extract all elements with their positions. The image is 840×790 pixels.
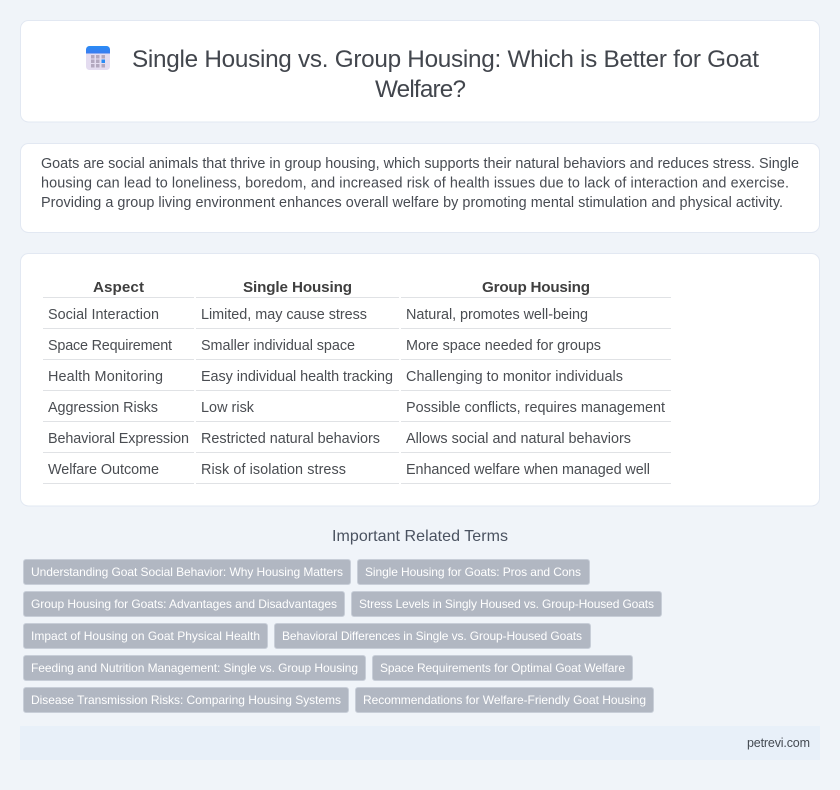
row: social interaction: Natural, promotes well-being [406,307,588,323]
row: health monitoring: Health Monitoring [48,369,163,385]
tag: Understanding Goat Social Behavior: Why Housing Matters [31,565,343,579]
intro text: Providing a group living environment enhances overall welfare by promoting mental stimulation and physical activity. [41,195,783,211]
row: aggression risks: Low risk [201,400,255,416]
row: behavioral expression: Behavioral Expression [48,431,189,447]
tag: Single Housing for Goats: Pros and Cons [365,565,581,579]
row: behavioral expression: Restricted natural behaviors [201,431,380,447]
title: Welfare? [375,76,466,103]
table header [43,279,671,298]
table header: Group Housing [482,279,590,296]
panel: header [20,20,820,122]
tag [24,624,268,648]
row: welfare outcome [43,462,671,484]
footer: petrevi.com [747,736,810,750]
row: behavioral expression: Allows social and natural behaviors [406,431,631,447]
row: welfare outcome: Enhanced welfare when managed well [406,462,650,478]
intro text: Goats are social animals that thrive in group housing, which supports their natural behaviors and reduces stress. Single [41,156,799,172]
icon: calendar [86,46,110,70]
tag [24,688,348,712]
title [132,46,759,103]
row: space requirement: Smaller individual space [201,338,355,354]
row: aggression risks [43,400,671,422]
row: social interaction [43,307,671,329]
tag: Behavioral Differences in Single vs. Group-Housed Goats [282,629,582,643]
row: welfare outcome: Risk of isolation stress [201,462,346,478]
row: social interaction: Social Interaction [48,307,159,323]
row: space requirement [43,338,671,360]
tag [358,560,590,584]
tag [24,656,366,680]
tag [24,592,344,616]
row: aggression risks: Aggression Risks [48,400,158,416]
row: social interaction: Limited, may cause stress [201,307,367,323]
table header: Aspect [93,279,144,296]
title: Single Housing vs. Group Housing: Which is Better for Goat [132,46,759,73]
tag: Recommendations for Welfare-Friendly Goat Housing [363,693,646,707]
tag: Group Housing for Goats: Advantages and Disadvantages [31,597,337,611]
tag [274,624,590,648]
row: health monitoring: Challenging to monitor individuals [406,369,623,385]
tag: Feeding and Nutrition Management: Single vs. Group Housing [31,661,358,675]
row: welfare outcome: Welfare Outcome [48,462,159,478]
row: space requirement: Space Requirement [48,338,172,354]
tag [352,592,662,616]
tag: Disease Transmission Risks: Comparing Housing Systems [31,693,341,707]
tag [24,560,350,584]
row: behavioral expression [43,431,671,453]
panel: comparison table [20,254,820,506]
tag [372,656,632,680]
panel: intro [20,144,820,232]
intro text: housing can lead to loneliness, boredom, and increased risk of health issues due to lack of interaction and exercise. [41,176,789,192]
related term tags [24,560,662,712]
intro text [41,156,799,211]
footer [20,726,820,760]
tag: Impact of Housing on Goat Physical Health [31,629,260,643]
row: health monitoring: Easy individual health tracking [201,369,393,385]
tag: Stress Levels in Singly Housed vs. Group-Housed Goats [359,597,654,611]
tag [356,688,654,712]
row: aggression risks: Possible conflicts, requires management [406,400,665,416]
tag: Space Requirements for Optimal Goat Welfare [380,661,625,675]
row: health monitoring [43,369,671,391]
heading: related terms: Important Related Terms [332,528,508,545]
table header: Single Housing [243,279,352,296]
row: space requirement: More space needed for groups [406,338,601,354]
